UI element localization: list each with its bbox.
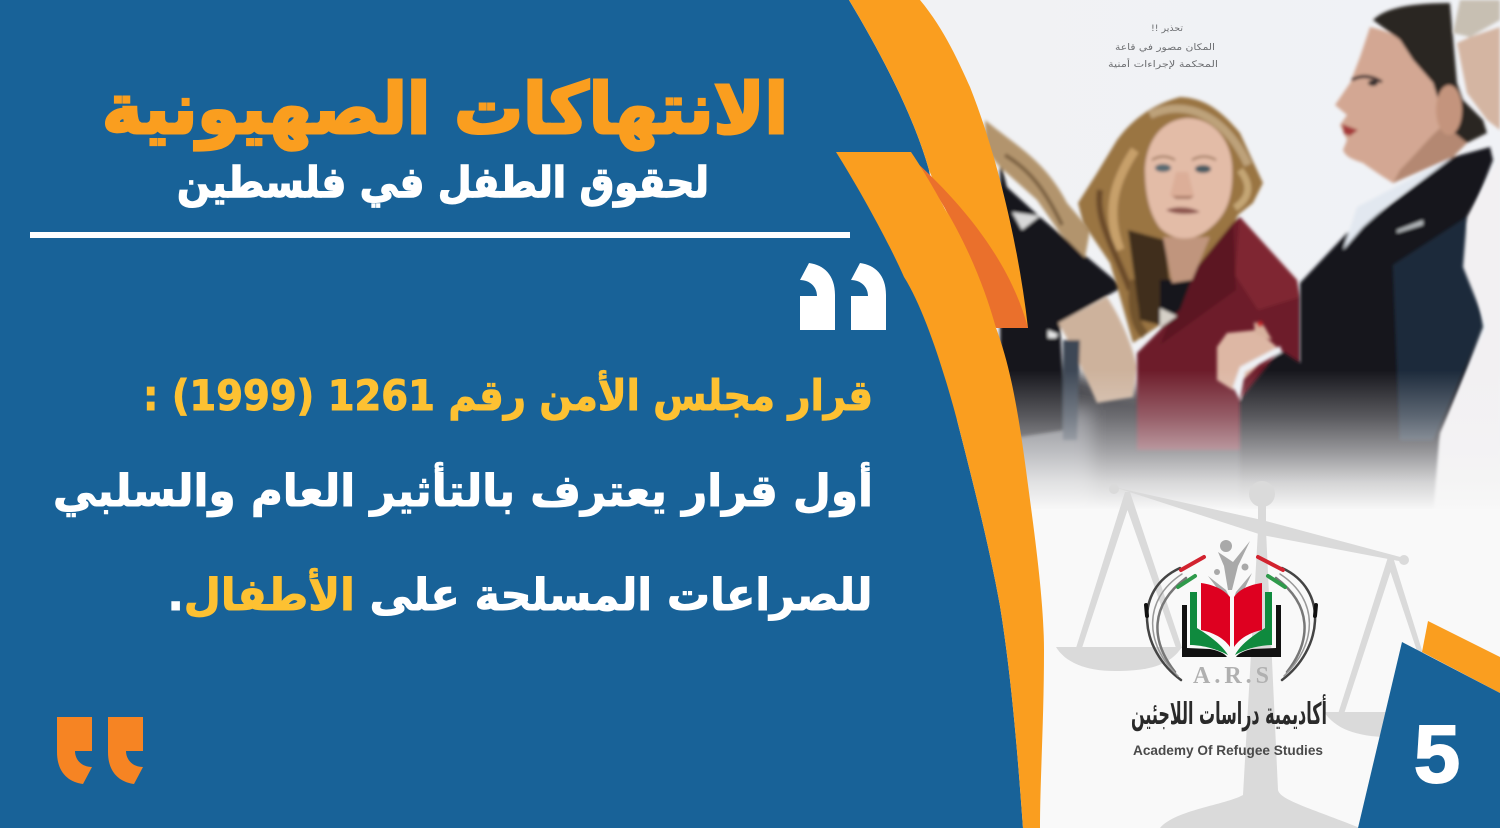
logo initials: A.R.S	[1193, 663, 1269, 689]
divider rule	[30, 232, 850, 238]
watermark: scales of justice	[1056, 481, 1425, 828]
subtitle: لحقوق الطفل في فلسطين	[177, 158, 709, 208]
photo: courtroom scene	[900, 0, 1500, 828]
logo: Academy of Refugee Studies	[1131, 540, 1327, 758]
wall notice text	[1108, 24, 1218, 70]
woman at right with dark jacket	[1217, 3, 1493, 515]
wall notice text: تحذير !!	[1151, 24, 1184, 34]
person at left with blonde hair and black shirt	[985, 120, 1137, 440]
logo Arabic name: أكاديمية دراسات اللاجئين	[1131, 694, 1327, 732]
hand and cuff	[1217, 330, 1277, 390]
shape: lower orange band	[836, 152, 1044, 828]
shape: upper orange band	[849, 0, 1028, 328]
wall notice text: المكان مصور في قاعة	[1115, 43, 1215, 53]
dark lower band of the crowd	[1000, 350, 1440, 515]
text: resolution line two: للصراعات المسلحة على الأطفال.	[168, 568, 873, 621]
icon: opening quote marks	[800, 263, 886, 330]
icon: closing quote marks	[57, 717, 143, 784]
logo English name: Academy Of Refugee Studies	[1133, 742, 1323, 758]
girl with curly hair and maroon jacket	[1078, 97, 1300, 450]
page number badge: 5	[1414, 709, 1460, 800]
open book	[1182, 605, 1281, 657]
shape: dark orange wedge	[905, 152, 1028, 328]
page number badge	[1358, 621, 1500, 828]
logo figures	[1208, 540, 1252, 598]
wall notice text: المحكمة لإجراءات أمنية	[1108, 58, 1218, 70]
lower photo fade	[900, 370, 1500, 510]
panel: blue background	[0, 0, 1023, 828]
person at far right edge	[1433, 0, 1500, 515]
text: resolution heading: قرار مجلس الأمن رقم 1261 (1999) :	[143, 370, 873, 421]
title: الانتهاكات الصهيونية	[102, 68, 788, 150]
logo rings	[1146, 557, 1316, 680]
text: resolution line one: أول قرار يعترف بالتأثير العام والسلبي	[53, 462, 873, 517]
